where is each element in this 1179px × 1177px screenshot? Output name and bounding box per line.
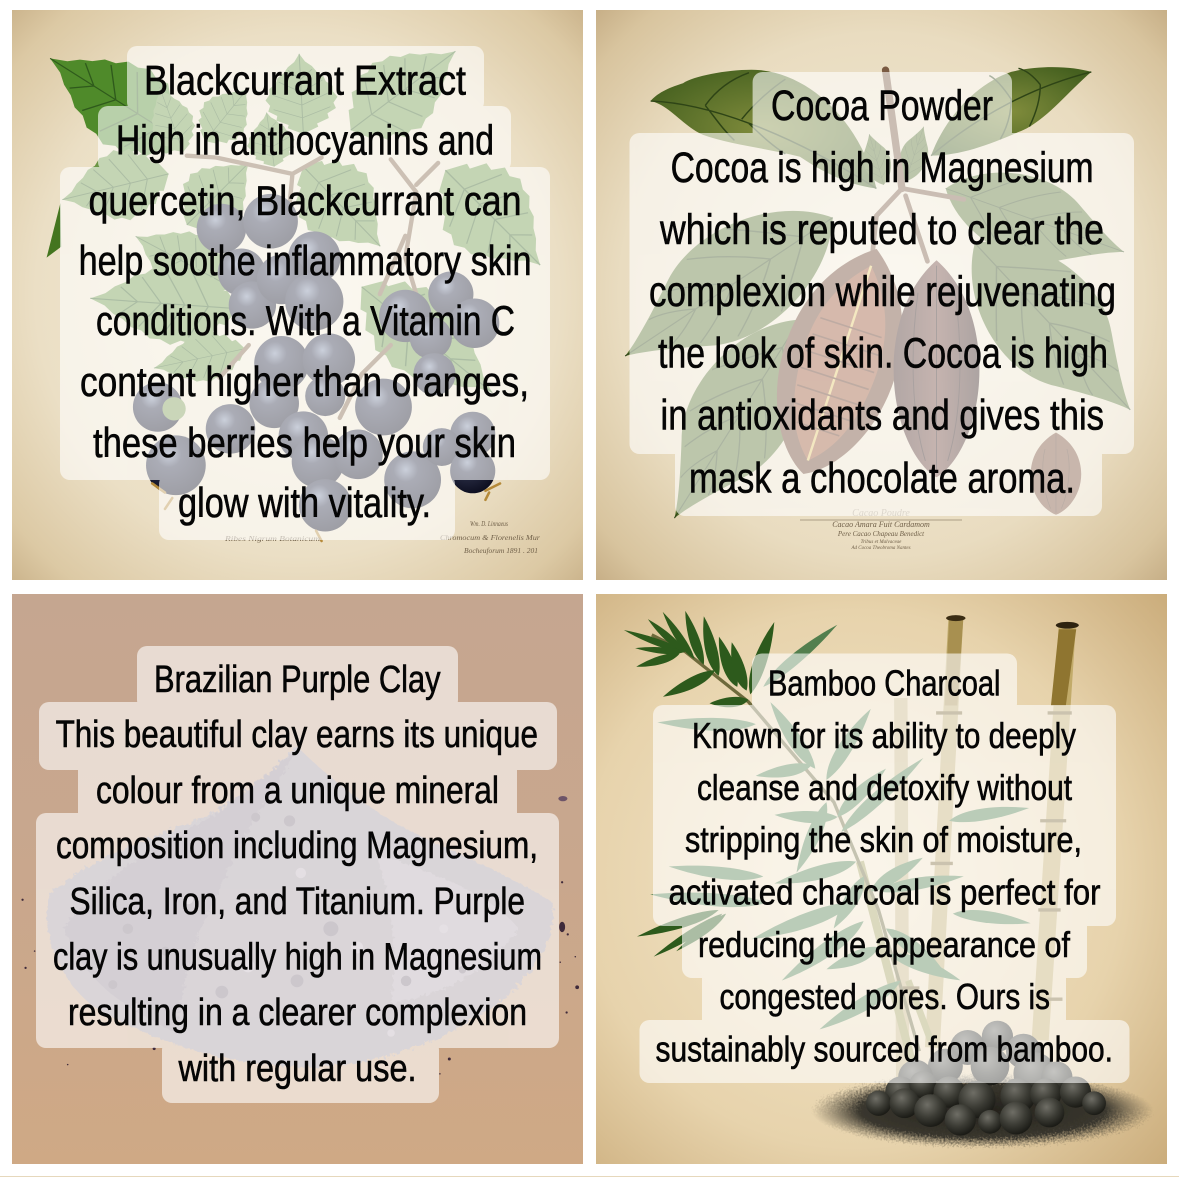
body text bbox=[656, 715, 1113, 1070]
illustration: purple clay powder pile bbox=[21, 747, 579, 1075]
heading: Bamboo Charcoal bbox=[768, 662, 1000, 704]
panel background: clay tone bbox=[12, 594, 583, 1164]
body text: with regular use. bbox=[178, 1048, 416, 1090]
caption script: illustration credits bbox=[224, 520, 540, 555]
text highlight boxes bbox=[36, 646, 559, 1103]
illustration: blackcurrant branch bbox=[26, 19, 573, 541]
small cocoa pod bbox=[1031, 432, 1081, 515]
panel: brazilian purple clay bbox=[12, 594, 583, 1164]
body text: Silica, Iron, and Titanium. Purple bbox=[70, 881, 525, 923]
caption script: illustration credits: Ad Cocoa Theobroma Nantes bbox=[850, 546, 911, 551]
body text: resulting in a clearer complexion bbox=[68, 992, 527, 1034]
panel background: aged paper bbox=[596, 594, 1167, 1164]
illustration: cocoa branch and pods bbox=[624, 66, 1131, 518]
open cocoa pod bbox=[777, 249, 902, 474]
caption script: illustration credits: Cacao Amara Fuit Cardamom bbox=[832, 520, 930, 529]
heading: Blackcurrant Extract bbox=[144, 56, 466, 104]
illustration: bamboo and charcoal bbox=[623, 609, 1154, 1148]
heading: Cocoa Powder bbox=[771, 82, 993, 130]
panel background: aged paper bbox=[12, 10, 583, 580]
body text: glow with vitality. bbox=[178, 479, 431, 526]
body text: clay is unusually high in Magnesium bbox=[53, 936, 542, 978]
body text: composition including Magnesium, bbox=[56, 825, 538, 867]
panel: cocoa powder bbox=[596, 10, 1170, 580]
text highlight boxes bbox=[640, 654, 1130, 1083]
panel: blackcurrant extract bbox=[12, 10, 583, 580]
body text bbox=[79, 117, 532, 526]
body text bbox=[53, 714, 542, 1090]
bamboo stalks bbox=[860, 618, 1067, 1077]
body text: reducing the appearance of bbox=[698, 924, 1071, 965]
body text: Known for its ability to deeply bbox=[692, 715, 1076, 756]
body text: High in anthocyanins and bbox=[116, 117, 494, 164]
body text: stripping the skin of moisture, bbox=[685, 819, 1082, 860]
body text: activated charcoal is perfect for bbox=[668, 872, 1101, 912]
branch bbox=[652, 635, 919, 1051]
body text: mask a chocolate aroma. bbox=[689, 454, 1075, 502]
caption script: illustration credits bbox=[832, 508, 930, 551]
text highlight boxes bbox=[60, 46, 550, 540]
body text: help soothe inflammatory skin bbox=[79, 237, 532, 284]
body text: conditions. With a Vitamin C bbox=[96, 297, 515, 344]
panel background: aged paper bbox=[596, 10, 1167, 580]
body text bbox=[649, 144, 1116, 502]
closed cocoa pod bbox=[894, 260, 979, 477]
charcoal pieces bbox=[866, 1021, 1106, 1136]
charcoal powder mound bbox=[812, 1073, 1154, 1148]
body text: content higher than oranges, bbox=[80, 358, 529, 405]
caption script: illustration credits: Chromocum & Florenelis Mur bbox=[440, 534, 540, 542]
body text: colour from a unique mineral bbox=[96, 770, 499, 812]
bottom edge line bbox=[0, 1176, 1179, 1177]
caption script: illustration credits: Cacao Poudre bbox=[852, 508, 910, 519]
body text: cleanse and detoxify without bbox=[697, 767, 1072, 808]
body text: these berries help your skin bbox=[93, 419, 516, 466]
panel: bamboo charcoal bbox=[596, 594, 1167, 1164]
body text: congested pores. Ours is bbox=[720, 976, 1050, 1017]
heading: Brazilian Purple Clay bbox=[154, 659, 441, 701]
caption rule bbox=[800, 520, 962, 521]
body text: This beautiful clay earns its unique bbox=[56, 714, 538, 756]
top leaves bbox=[651, 67, 1091, 188]
caption script: illustration credits: Pere Cacao Chapeau Benedict bbox=[837, 530, 925, 538]
caption script: illustration credits: Ribes Nigrum Botanicum bbox=[224, 535, 320, 543]
text highlight boxes bbox=[630, 72, 1134, 516]
caption script: illustration credits: Bocheuforum 1891 . 201 bbox=[464, 547, 538, 555]
body text: quercetin, Blackcurrant can bbox=[88, 177, 522, 224]
caption script: illustration credits: Wm. D. Linnaeus bbox=[470, 520, 508, 528]
caption script: illustration credits: Tribus et Malvaceae bbox=[861, 540, 902, 545]
pale leaves bbox=[650, 620, 1032, 1036]
dark leaves bbox=[623, 609, 779, 961]
